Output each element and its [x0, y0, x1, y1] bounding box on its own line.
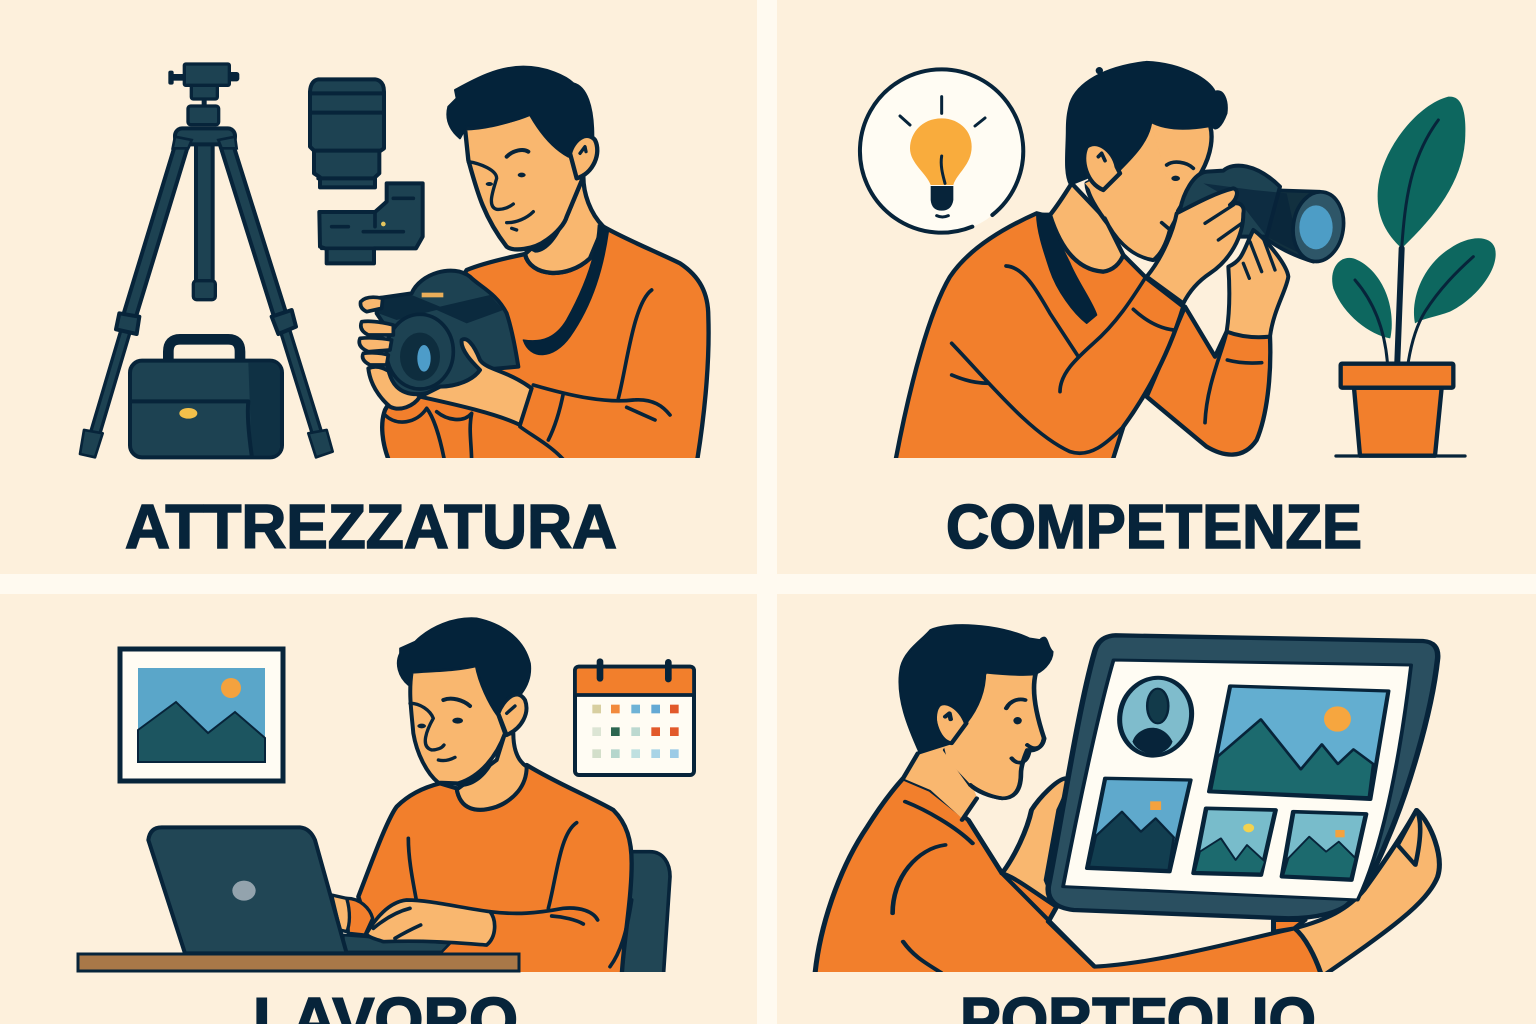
heading: competenze: COMPETENZE: [946, 493, 1362, 562]
heading: attrezzatura: ATTREZZATURA: [125, 493, 617, 562]
icon: lens: [310, 79, 384, 187]
small photo 1: [1087, 778, 1191, 872]
icon: tripod: [80, 64, 333, 457]
figure: man working at laptop: [332, 618, 694, 977]
figure: man holding camera: [359, 67, 709, 463]
icon: tablet with gallery: [1048, 635, 1438, 918]
figure: man holding tablet: [815, 625, 1439, 977]
icon: camera bag: [130, 339, 282, 457]
panel: competenze: [777, 0, 1536, 574]
desk: [78, 954, 519, 971]
avatar: [1115, 675, 1196, 758]
small photo 3: [1282, 812, 1366, 880]
panel: lavoro: [0, 594, 757, 1024]
figure: man looking through camera: [859, 62, 1348, 463]
small photo 2: [1194, 808, 1276, 875]
icon: laptop: [148, 827, 347, 953]
icon: framed landscape picture: [120, 649, 283, 781]
panel: attrezzatura: [0, 0, 757, 574]
large photo: [1209, 686, 1388, 799]
panel: portfolio: [777, 594, 1536, 1024]
icon: calendar: [575, 662, 694, 775]
chair: [622, 852, 670, 977]
icon: potted plant: [1332, 97, 1496, 456]
icon: light bulb bubble: [859, 69, 1023, 233]
icon: flash accessory: [319, 183, 423, 263]
